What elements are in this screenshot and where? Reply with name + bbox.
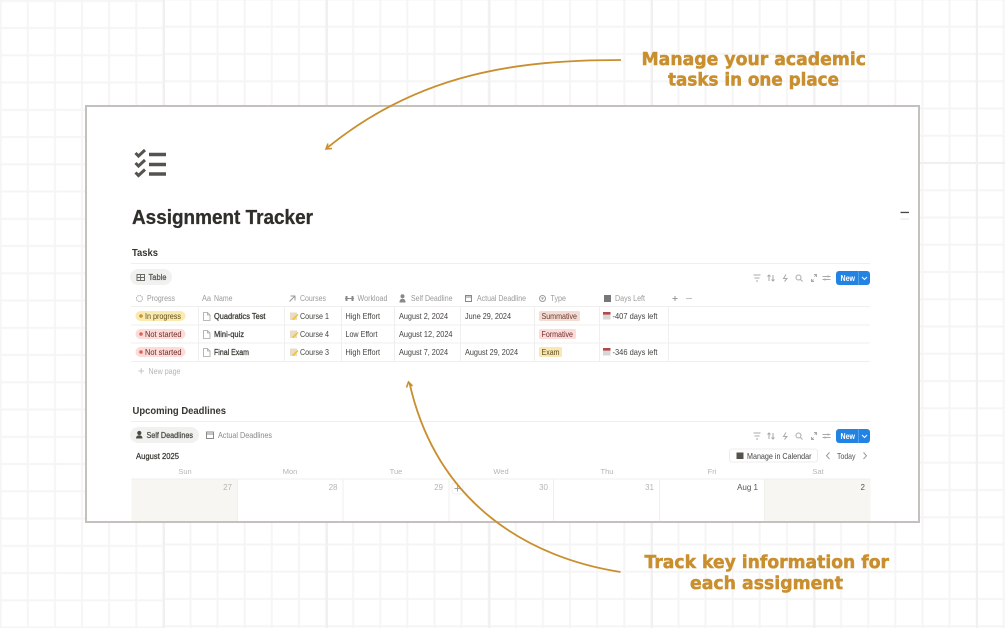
table row: final exam: Final Exam — [214, 347, 249, 357]
table row: quadratics test: June 29, 2024 — [465, 311, 511, 321]
caption: manage your academic tasks: tasks in one place — [668, 70, 839, 90]
collapse dash — [900, 212, 909, 220]
table header row: Self Deadline — [411, 293, 453, 303]
table header row: Name — [214, 293, 233, 303]
button: manage in calendar — [730, 449, 818, 462]
calendar navigation: Today — [837, 451, 856, 461]
table row: mini-quiz: Mini-quiz — [214, 329, 244, 339]
table header row: Courses — [300, 293, 326, 303]
calendar navigation — [826, 451, 866, 461]
table row: quadratics test: High Effort — [346, 311, 381, 321]
table header row: Type — [550, 293, 566, 303]
calendar weekday headers: Wed — [493, 467, 509, 476]
toolbar: tasks — [754, 271, 870, 285]
table header row: Days Left — [615, 293, 645, 303]
table row: final exam: Course 3 — [300, 347, 329, 357]
new page row — [138, 366, 181, 376]
table row: final exam: Not started — [145, 347, 182, 357]
toolbar: tasks: New — [840, 273, 855, 283]
calendar month label: August 2025 — [136, 451, 179, 461]
icon: checklist — [136, 150, 166, 176]
caption: manage your academic tasks: Manage your academic — [642, 49, 866, 70]
table row: final exam: -346 days left — [612, 347, 658, 357]
calendar weekday headers: Tue — [390, 467, 402, 476]
title: Assignment Tracker — [132, 207, 313, 229]
caption: manage your academic tasks — [642, 49, 866, 90]
table row: final exam — [136, 347, 658, 357]
section heading: upcoming deadlines: Upcoming Deadlines — [132, 405, 226, 417]
caption: track key information — [644, 552, 889, 594]
calendar weekday headers: Mon — [283, 467, 297, 476]
calendar grid: 30 — [539, 483, 549, 492]
button: manage in calendar: Manage in Calendar — [747, 451, 812, 461]
table row: quadratics test: Course 1 — [300, 311, 329, 321]
arrow: caption to page top — [326, 60, 621, 149]
arrow: caption to table — [406, 382, 620, 572]
panel: assignment tracker screenshot — [86, 106, 919, 522]
table row: quadratics test: Summative — [542, 311, 577, 321]
table row: mini-quiz: Not started — [145, 329, 182, 339]
table header row: Progress — [147, 293, 175, 303]
table row: final exam: August 29, 2024 — [465, 347, 518, 357]
table row: mini-quiz: August 12, 2024 — [399, 329, 453, 339]
table row: mini-quiz: Low Effort — [346, 329, 378, 339]
calendar weekday headers: Sun — [178, 467, 192, 476]
tab: table — [130, 269, 172, 285]
table row: quadratics test: In progress — [145, 311, 181, 321]
table row: quadratics test: -407 days left — [612, 311, 658, 321]
calendar grid: 28 — [329, 483, 338, 492]
toolbar: calendar: New — [840, 431, 855, 441]
table row: quadratics test: Quadratics Test — [214, 311, 266, 321]
table header row — [136, 293, 692, 303]
section heading: tasks: Tasks — [132, 247, 158, 259]
table row: final exam: August 7, 2024 — [399, 347, 448, 357]
table row: mini-quiz: Course 4 — [300, 329, 329, 339]
tab: self deadlines: Self Deadlines — [146, 430, 193, 440]
caption: track key information: each assigment — [690, 573, 843, 594]
table header row: Aa — [202, 293, 211, 303]
table row: final exam: High Effort — [346, 347, 381, 357]
calendar weekday headers: Fri — [708, 467, 717, 476]
calendar grid — [132, 479, 870, 521]
table row: quadratics test: August 2, 2024 — [399, 311, 448, 321]
table grid lines — [131, 306, 870, 362]
table header row: Actual Deadline — [477, 293, 526, 303]
table row: quadratics test — [136, 311, 658, 321]
tab: actual deadlines: Actual Deadlines — [218, 430, 272, 440]
table row: mini-quiz — [136, 329, 576, 339]
calendar grid: 2 — [861, 483, 866, 492]
calendar grid: 27 — [223, 483, 233, 492]
tab: self deadlines — [130, 427, 199, 443]
new page row: New page — [148, 366, 181, 376]
tab: table: Table — [148, 272, 167, 282]
calendar grid: 29 — [434, 483, 444, 492]
calendar grid: Aug 1 — [737, 483, 759, 492]
caption: track key information: Track key information for — [644, 552, 889, 573]
table row: final exam: Exam — [542, 347, 560, 357]
table header row: Workload — [358, 293, 388, 303]
calendar grid: 31 — [645, 483, 655, 492]
calendar weekday headers: Thu — [601, 467, 613, 476]
calendar weekday headers — [178, 467, 825, 476]
calendar weekday headers: Sat — [812, 467, 825, 476]
table row: mini-quiz: Formative — [542, 329, 573, 339]
toolbar: calendar — [754, 429, 870, 443]
